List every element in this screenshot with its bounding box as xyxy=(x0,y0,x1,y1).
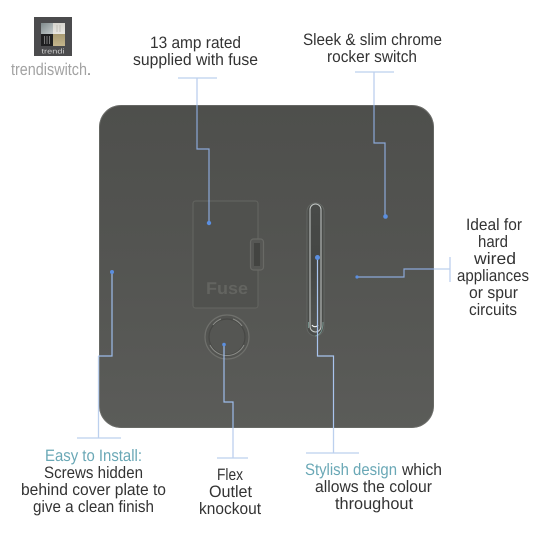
callout: chrome rocker switch: Sleek & slim chrome xyxy=(303,31,442,49)
callout: hard wired appliances: Ideal for xyxy=(466,216,522,234)
callout: flex outlet knockout: Outlet xyxy=(209,483,252,501)
chrome rocker switch xyxy=(307,203,324,336)
callout: 13 amp rated: supplied with fuse xyxy=(133,51,258,69)
icon: trendi logo tile: trendi xyxy=(42,48,65,56)
callout: 13 amp rated xyxy=(133,34,258,225)
callout: stylish design: Stylish design xyxy=(305,461,397,479)
callout: flex outlet knockout: knockout xyxy=(199,500,261,518)
callout: flex outlet knockout xyxy=(199,343,261,518)
fuse label: Fuse xyxy=(206,279,248,298)
fuse cover xyxy=(193,201,264,308)
callout: easy to install: give a clean finish xyxy=(33,498,154,516)
flex outlet knockout ring xyxy=(205,315,249,359)
callout: easy to install: Screws hidden xyxy=(44,464,143,482)
callout: flex outlet knockout: Flex xyxy=(217,466,244,484)
logo: trendiswitch xyxy=(11,17,91,79)
callout: stylish design: throughout xyxy=(335,495,413,513)
callout: chrome rocker switch: rocker switch xyxy=(327,48,417,66)
callout: hard wired appliances: or spur xyxy=(469,284,518,302)
callout: stylish design: which xyxy=(401,461,442,479)
callout: hard wired appliances: appliances xyxy=(457,267,529,285)
callout: 13 amp rated: 13 amp rated xyxy=(150,34,241,52)
callout: hard wired appliances: circuits xyxy=(469,301,517,319)
callout: easy to install: Easy to Install: xyxy=(45,447,142,465)
callout: easy to install: behind cover plate to xyxy=(21,481,166,499)
callout: chrome rocker switch xyxy=(303,31,442,219)
panel: charcoal switch plate xyxy=(99,105,434,428)
callout: hard wired appliances: wired xyxy=(473,250,516,268)
logo wordmark: trendiswitch. xyxy=(11,60,91,79)
callout: hard wired appliances xyxy=(355,216,529,319)
callout: stylish design xyxy=(305,255,442,513)
callout: easy to install xyxy=(21,270,166,516)
callout: stylish design: allows the colour xyxy=(315,478,432,496)
callout: hard wired appliances: hard xyxy=(478,233,508,251)
